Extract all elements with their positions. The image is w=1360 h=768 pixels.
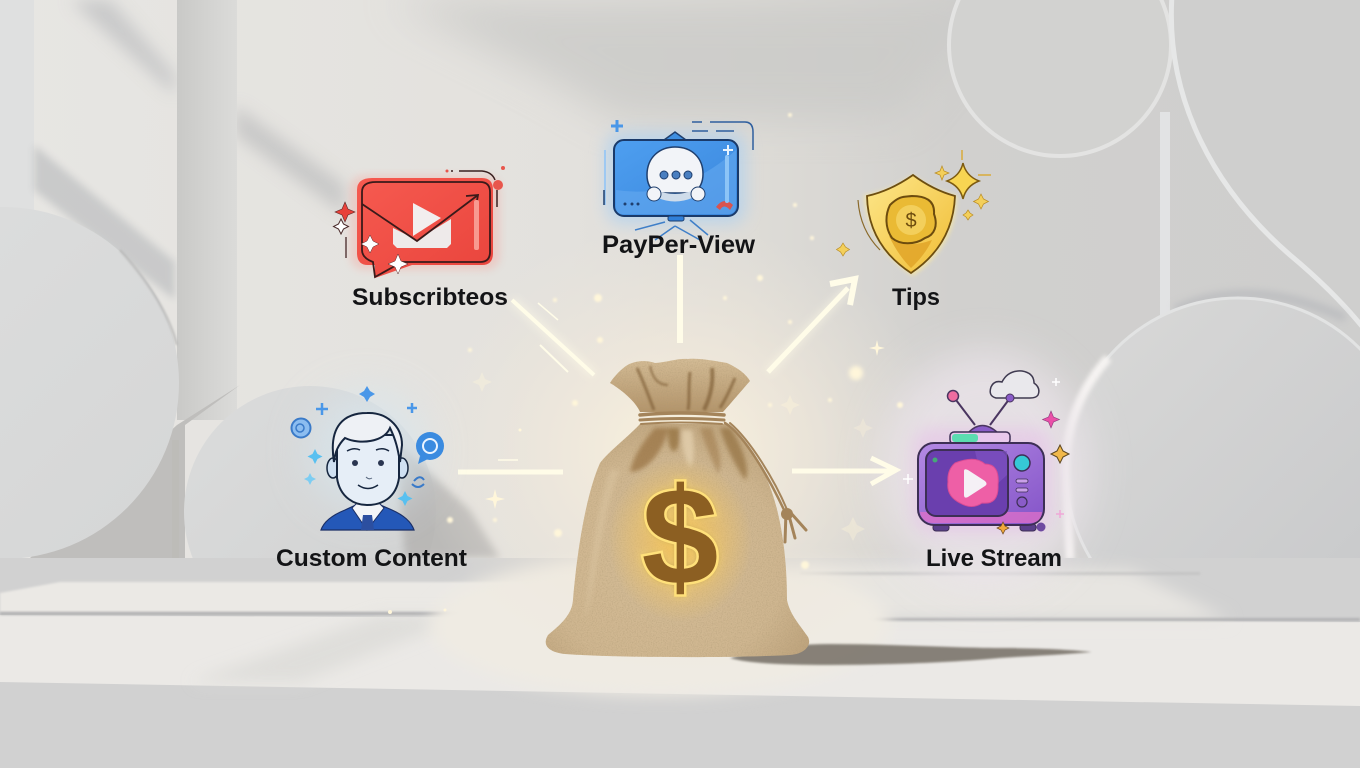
money bag [546,359,809,657]
label: Subscribteos: Subscribteos [352,284,508,311]
icon: red envelope play [334,166,505,278]
central glow [415,225,945,675]
background: column [177,0,237,420]
icon: gold shield with coin: $ [905,210,917,232]
ruffle folds [637,366,735,410]
background: left lower shadow block [30,385,240,558]
background: bottom-right disc [1066,298,1360,642]
item: Live Stream [903,371,1069,572]
background: top-right disc [949,0,1171,156]
sparkle particles [388,113,903,614]
dollar sign: $ [642,460,718,614]
background: wall [0,0,1360,565]
bag folds [585,428,747,620]
rope tie [640,413,806,542]
arrow: to Live Stream [792,458,896,484]
label: Tips: Tips [892,284,940,311]
label: Live Stream: Live Stream [926,545,1062,572]
background: right curved panel [1160,0,1360,330]
item: Custom Content [276,386,467,572]
item: Subscribers [334,166,508,311]
background: floor [0,555,1360,768]
icon: blue screen with chat bubble [604,120,753,240]
arrow: to Tips [768,279,855,372]
arrow: to Custom Content [458,460,563,472]
icon: gold shield with coin [836,150,991,276]
bag shadow [730,644,1092,665]
item: Pay Per View [602,120,756,259]
bag body [546,424,809,657]
icon: man portrait with blue accents [292,386,444,530]
label: PayPer-View: PayPer-View [602,231,756,259]
bag ruffle [610,359,750,412]
background: left small disc [172,386,500,638]
background: left large disc [0,207,179,559]
label: Custom Content: Custom Content [276,545,467,572]
tv side glow [880,350,1090,590]
icon: purple retro TV [903,371,1069,534]
item: Tips [836,150,991,311]
dollar glow [608,458,752,622]
arrow: to Subscribers [512,300,594,375]
arrow: to Pay Per View [674,255,686,343]
